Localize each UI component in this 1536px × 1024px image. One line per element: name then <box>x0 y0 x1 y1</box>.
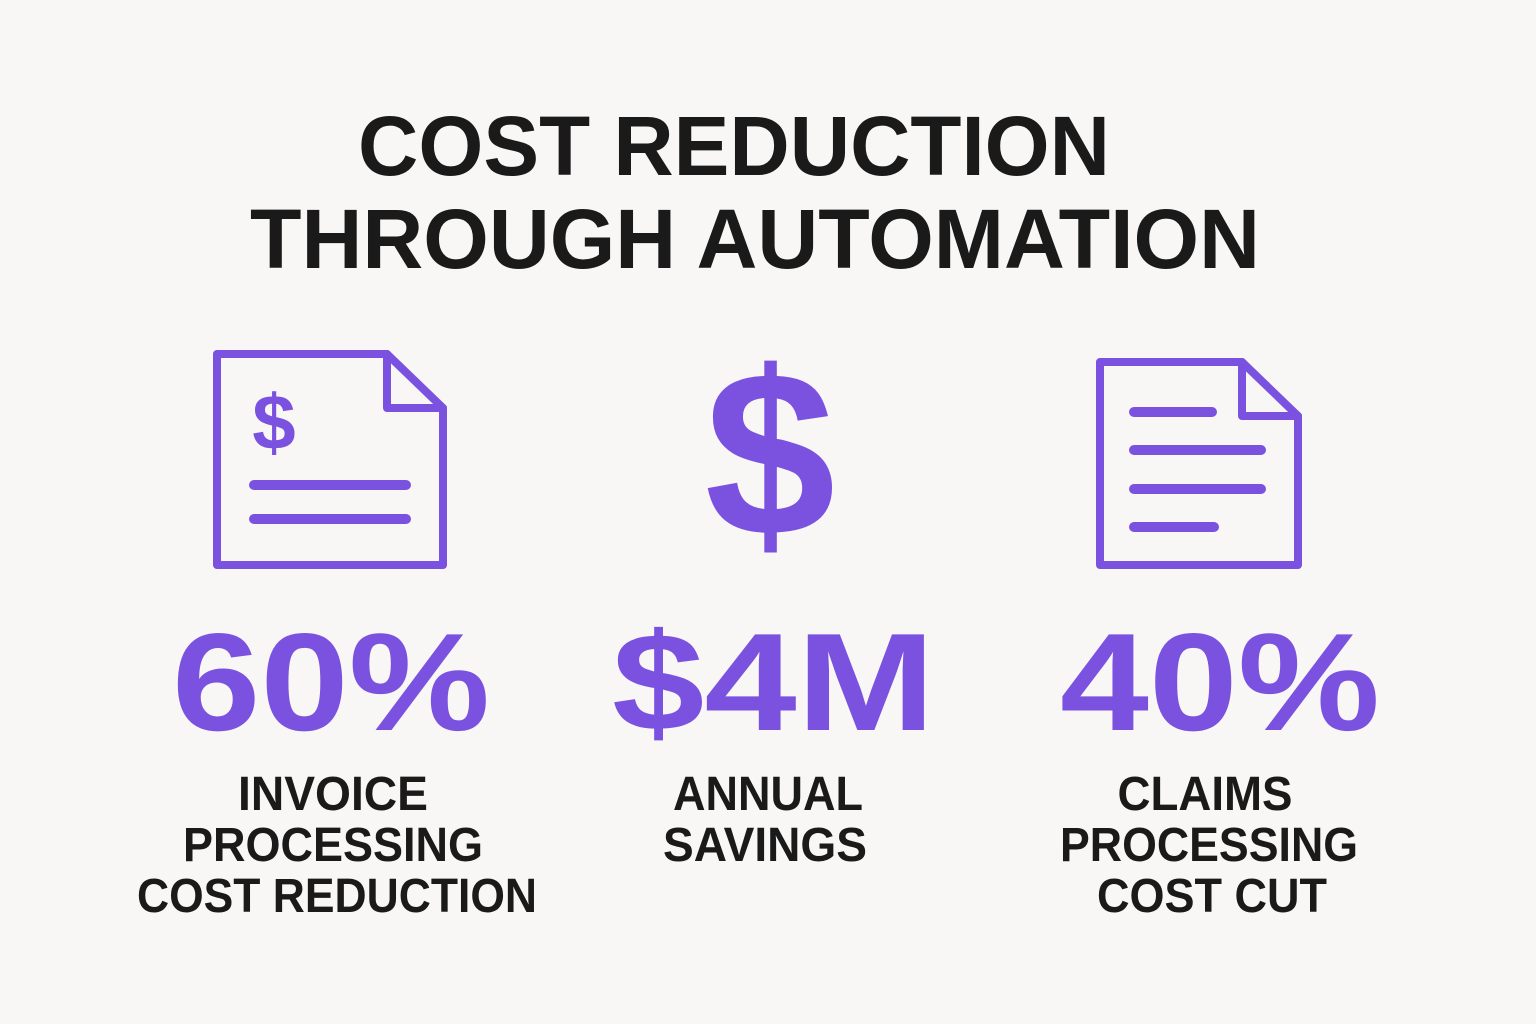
stat: 40% <box>1060 605 1380 923</box>
title: THROUGH AUTOMATION <box>250 192 1260 286</box>
label: claims <box>1060 768 1358 923</box>
stat: 60%: 60% <box>172 605 490 760</box>
label: claims: PROCESSING <box>1060 819 1358 872</box>
stat: $4M <box>612 605 935 872</box>
label: claims: COST CUT <box>1097 870 1327 923</box>
label: savings <box>663 768 867 872</box>
icon: claims document <box>1100 362 1298 565</box>
label: invoice <box>137 768 537 923</box>
icon: dollar sign: $ <box>705 322 835 585</box>
stat: $4M: $4M <box>612 605 935 760</box>
icon: invoice document: $ <box>252 378 296 466</box>
label: invoice: INVOICE <box>238 768 428 821</box>
title: COST REDUCTION <box>358 99 1110 193</box>
label: savings: ANNUAL <box>673 768 863 821</box>
label: claims: CLAIMS <box>1118 768 1292 821</box>
stat: 60% <box>137 605 537 923</box>
title <box>250 99 1260 286</box>
label: invoice: COST REDUCTION <box>137 870 537 923</box>
label: savings: SAVINGS <box>663 819 867 872</box>
stat: 40%: 40% <box>1060 605 1380 760</box>
label: invoice: PROCESSING <box>183 819 483 872</box>
icon: invoice document <box>217 354 443 565</box>
